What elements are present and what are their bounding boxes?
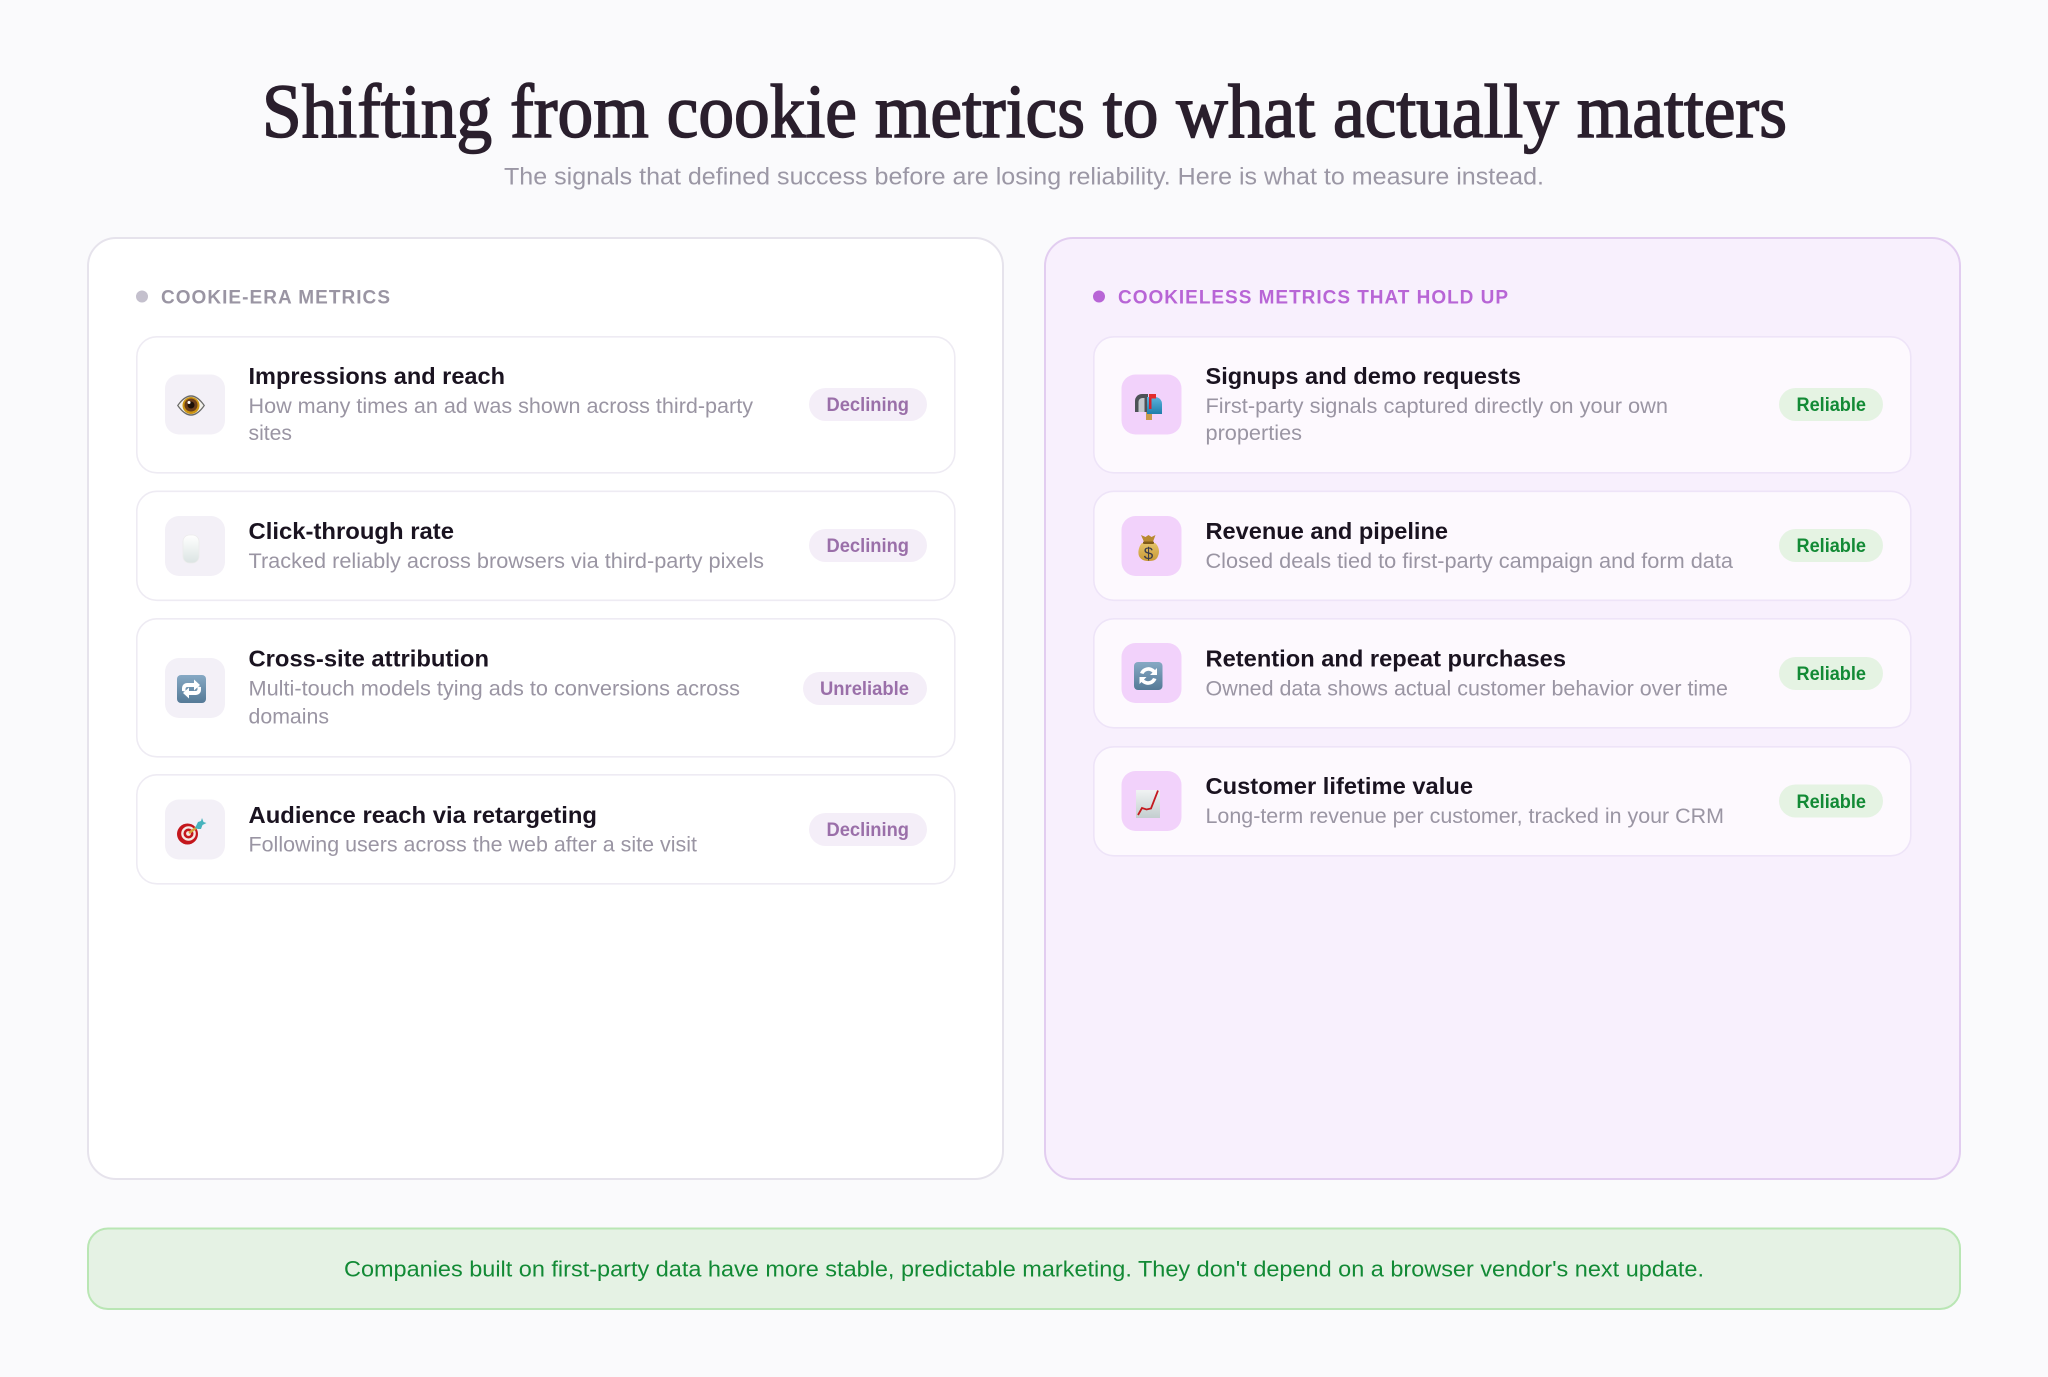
status badge bbox=[1779, 388, 1883, 421]
metric title: Audience reach via retargeting bbox=[248, 802, 597, 828]
card: revenue and pipeline bbox=[1094, 491, 1911, 600]
metric description: Following users across the web after a site visit bbox=[248, 834, 697, 856]
metric title: Retention and repeat purchases bbox=[1206, 646, 1566, 672]
card: retention and repeat purchases bbox=[1094, 619, 1911, 728]
status badge bbox=[809, 529, 927, 562]
card: click-through rate bbox=[137, 491, 955, 600]
metric description: Owned data shows actual customer behavior over time bbox=[1206, 678, 1728, 700]
metric description bbox=[1206, 395, 1668, 445]
icon: money bag bbox=[1122, 516, 1182, 576]
subtitle: The signals that defined success before are losing reliability. Here is what to measure instead. bbox=[504, 164, 1544, 190]
panel heading: cookieless metrics: COOKIELESS METRICS THAT HOLD UP bbox=[1118, 288, 1508, 309]
metric title: Revenue and pipeline bbox=[1206, 518, 1448, 544]
status badge: Declining bbox=[826, 536, 909, 557]
icon: money bag: $ bbox=[1144, 544, 1154, 563]
metric description: Closed deals tied to first-party campaign and form data bbox=[1206, 550, 1733, 573]
metric description: How many times an ad was shown across third-party bbox=[248, 395, 754, 418]
status badge: Declining bbox=[826, 395, 909, 416]
metric description: Tracked reliably across browsers via third-party pixels bbox=[248, 550, 764, 573]
status badge: Reliable bbox=[1796, 664, 1866, 685]
metric description: Multi-touch models tying ads to conversions across bbox=[248, 678, 740, 700]
icon: mailbox bbox=[1122, 374, 1182, 434]
status badge: Reliable bbox=[1796, 395, 1866, 416]
card: impressions and reach bbox=[137, 337, 955, 473]
metric title: Signups and demo requests bbox=[1206, 363, 1521, 389]
card: signups and demo requests bbox=[1094, 337, 1911, 473]
icon: cycle arrows bbox=[1122, 643, 1182, 703]
metric title: Customer lifetime value bbox=[1206, 773, 1473, 799]
panel heading: cookie-era metrics: COOKIE-ERA METRICS bbox=[161, 288, 390, 309]
metric description bbox=[248, 395, 754, 445]
title: Shifting from cookie metrics to what actually matters bbox=[262, 70, 1787, 154]
callout banner: Companies built on first-party data have more stable, predictable marketing. They don't depend on a browser vendor's next update. bbox=[344, 1256, 1704, 1282]
panel: cookie-era metrics bbox=[88, 238, 1003, 1179]
status badge bbox=[1779, 784, 1883, 818]
status badge: Reliable bbox=[1796, 536, 1866, 557]
status badge bbox=[1779, 529, 1883, 562]
metric description: domains bbox=[248, 706, 329, 728]
metric title: Cross-site attribution bbox=[248, 646, 489, 672]
status badge bbox=[809, 813, 927, 846]
icon: eye bbox=[165, 374, 225, 434]
card: audience reach via retargeting bbox=[137, 775, 955, 884]
status badge bbox=[803, 672, 927, 705]
metric title: Click-through rate bbox=[248, 518, 454, 544]
icon: dart target bbox=[165, 800, 225, 860]
icon: repeat arrows bbox=[165, 658, 225, 718]
status badge: Declining bbox=[826, 820, 909, 841]
card: cross-site attribution bbox=[137, 619, 955, 757]
metric description: Long-term revenue per customer, tracked in your CRM bbox=[1206, 805, 1724, 828]
panel: cookieless metrics bbox=[1045, 238, 1960, 1179]
callout banner bbox=[88, 1228, 1960, 1309]
metric description: properties bbox=[1206, 422, 1302, 445]
status badge bbox=[809, 388, 927, 421]
status badge bbox=[1779, 657, 1883, 690]
metric title: Impressions and reach bbox=[248, 363, 505, 389]
metric description: sites bbox=[248, 422, 292, 445]
metric description bbox=[248, 678, 740, 728]
status badge: Unreliable bbox=[820, 679, 909, 700]
metric description: First-party signals captured directly on your own bbox=[1206, 395, 1668, 418]
status badge: Reliable bbox=[1796, 792, 1866, 813]
icon: computer mouse bbox=[165, 516, 225, 576]
card: customer lifetime value bbox=[1094, 747, 1911, 856]
icon: rising chart bbox=[1122, 771, 1182, 831]
